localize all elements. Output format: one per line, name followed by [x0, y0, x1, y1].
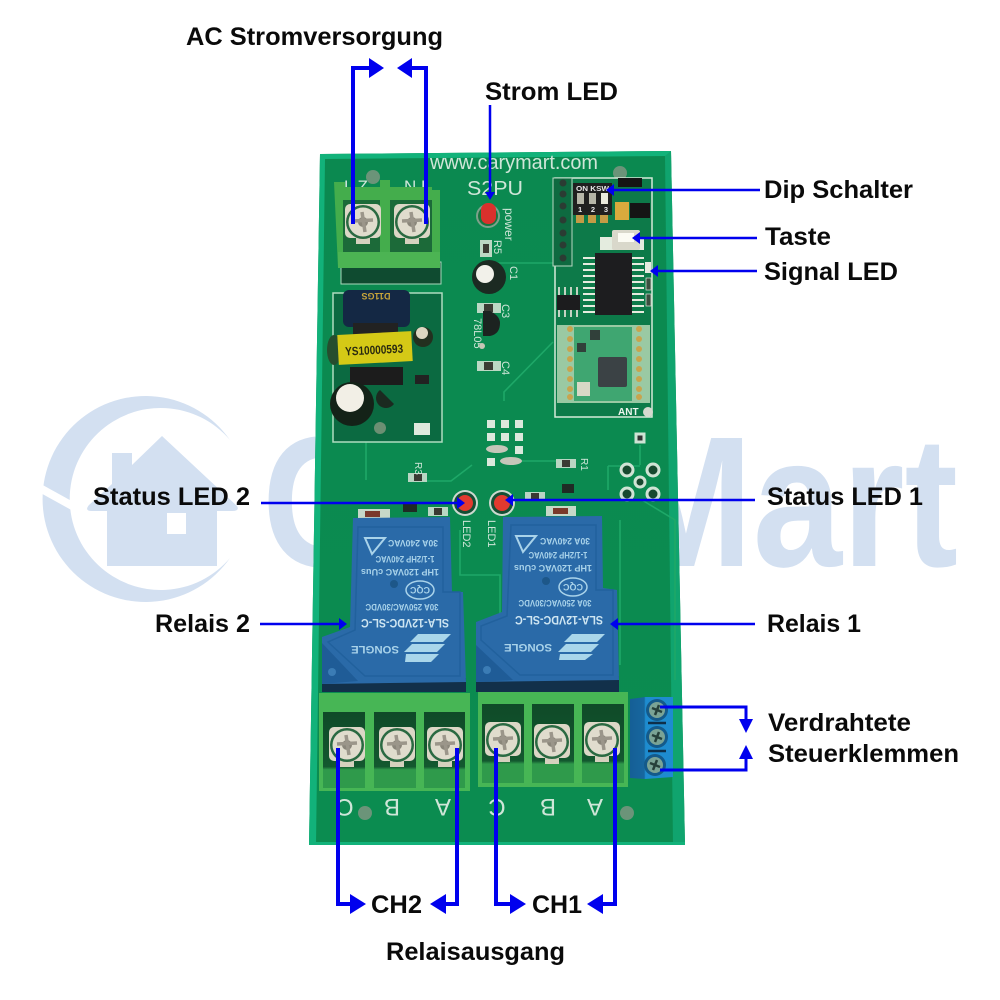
R5, C1, transistor, C3, C4: C4 — [499, 361, 511, 375]
relay 1 — [476, 516, 619, 692]
relay 1: SONGLE — [504, 641, 552, 653]
label: Relais 1: Relais 1 — [767, 610, 861, 638]
arrow: Dip Schalter — [606, 184, 760, 196]
dip switch — [573, 183, 612, 223]
arrow: wired terminal top — [660, 707, 753, 733]
R5, C1, transistor, C3, C4: C1 — [507, 266, 519, 280]
board traces — [366, 263, 675, 680]
arrow: Status LED 2 — [261, 497, 465, 509]
relay 2: 1-1/2HP 240VAC — [375, 554, 434, 564]
relay 2: SLA-12VDC-SL-C — [361, 616, 449, 630]
AC power terminal — [334, 180, 441, 284]
relay 1: 30A 250VAC/30VDC — [518, 598, 592, 608]
status LED 2: LED2 — [460, 520, 472, 548]
arrow: CH2 left — [338, 748, 366, 914]
dip switch: ON KSW — [576, 186, 609, 193]
header pins — [553, 178, 572, 266]
label: Relais 2: Relais 2 — [155, 610, 250, 638]
status LED 1 — [485, 490, 515, 548]
arrow: wired terminal bottom — [660, 745, 753, 770]
transformer label: YS10000593 — [345, 342, 404, 359]
arrow: CH2 right — [430, 748, 457, 914]
relay 1: 1HP 120VAC cUus — [514, 563, 592, 573]
relay 1: CQC — [562, 582, 583, 592]
relay output terminal 2 — [319, 693, 470, 791]
terminal letters: A — [587, 793, 603, 820]
terminal letters: B — [384, 793, 400, 820]
board model text: S2PU — [467, 178, 523, 200]
relay 1: 1-1/2HP 240VAC — [528, 550, 588, 560]
relay 1: SLA-12VDC-SL-C — [515, 613, 603, 627]
power supply module — [327, 290, 442, 442]
label: Signal LED: Signal LED — [764, 258, 898, 286]
status components: R3 — [412, 462, 423, 475]
status LED 2 — [452, 490, 478, 548]
power LED: power — [502, 208, 516, 241]
wireless control module — [553, 178, 653, 418]
terminal letters: C — [336, 793, 354, 820]
R5, C1, transistor, C3, C4: 78L05 — [471, 318, 483, 349]
right pad footprint — [621, 434, 659, 500]
arrow: AC power right — [397, 58, 426, 224]
terminal letters: C — [488, 793, 506, 820]
relay 1: 30A 240VAC — [540, 536, 590, 546]
terminal letters: A — [435, 793, 451, 820]
arrow: AC power left — [353, 58, 384, 224]
ANT label: ANT — [618, 407, 639, 418]
R5, C1, transistor, C3, C4: C3 — [499, 304, 511, 318]
label: Status LED 1: Status LED 1 — [767, 483, 923, 511]
heading: AC Stromversorgung: AC Stromversorgung — [186, 23, 443, 51]
label: Dip Schalter: Dip Schalter — [764, 176, 913, 204]
pad grid — [486, 420, 523, 466]
arrow: Status LED 1 — [505, 494, 755, 506]
arrow: Relais 2 — [260, 618, 347, 630]
terminal letters — [336, 793, 603, 820]
R5, C1, transistor, C3, C4: R5 — [491, 240, 503, 254]
arrow: CH1 right — [587, 748, 615, 914]
terminal letters: B — [540, 793, 556, 820]
RF radio module — [557, 325, 650, 403]
power supply module: D11GS — [361, 291, 391, 301]
relay 2 — [322, 517, 466, 692]
status components: R1 — [578, 458, 589, 471]
status LED 1: LED1 — [485, 520, 497, 548]
label: Verdrahtete Steuerklemmen: Verdrahtete — [768, 709, 911, 737]
status components — [358, 458, 589, 519]
relay 2: 30A 240VAC — [388, 538, 438, 548]
label: Relaisausgang: Relaisausgang — [386, 938, 565, 966]
label: Verdrahtete Steuerklemmen: Steuerklemmen — [768, 740, 959, 768]
board substrate — [309, 151, 685, 845]
relay 2: 1HP 120VAC cUus — [361, 567, 439, 577]
power LED — [476, 203, 516, 241]
tactile button — [600, 230, 644, 250]
wired control terminal — [630, 697, 673, 779]
label: Strom LED: Strom LED — [485, 78, 618, 106]
relay 2: 30A 250VAC/30VDC — [365, 602, 438, 612]
label: CH1: CH1 — [532, 891, 582, 919]
mounting holes — [358, 166, 634, 820]
arrow: Relais 1 — [610, 618, 755, 630]
relay output terminal 1 — [478, 692, 628, 787]
AC terminal labels right: N L — [404, 177, 430, 196]
R5, C1, transistor, C3, C4 — [471, 240, 519, 375]
label: Status LED 2: Status LED 2 — [93, 483, 250, 511]
arrow: Strom LED — [485, 105, 495, 200]
main chip — [583, 253, 644, 315]
dip switch: 1 2 3 — [578, 205, 608, 214]
panel: circuit board — [309, 151, 685, 845]
arrow: CH1 left — [496, 748, 526, 914]
relay 2: SONGLE — [351, 643, 399, 655]
arrow: Signal LED — [650, 265, 757, 277]
board url text: www.carymart.com — [429, 152, 598, 174]
relay 2: CQC — [410, 585, 430, 595]
label: Verdrahtete Steuerklemmen — [768, 709, 959, 768]
label: CH2: CH2 — [371, 891, 422, 919]
AC terminal labels: L Z — [344, 177, 368, 196]
arrow: Taste — [632, 232, 757, 244]
label: Taste: Taste — [765, 223, 831, 251]
